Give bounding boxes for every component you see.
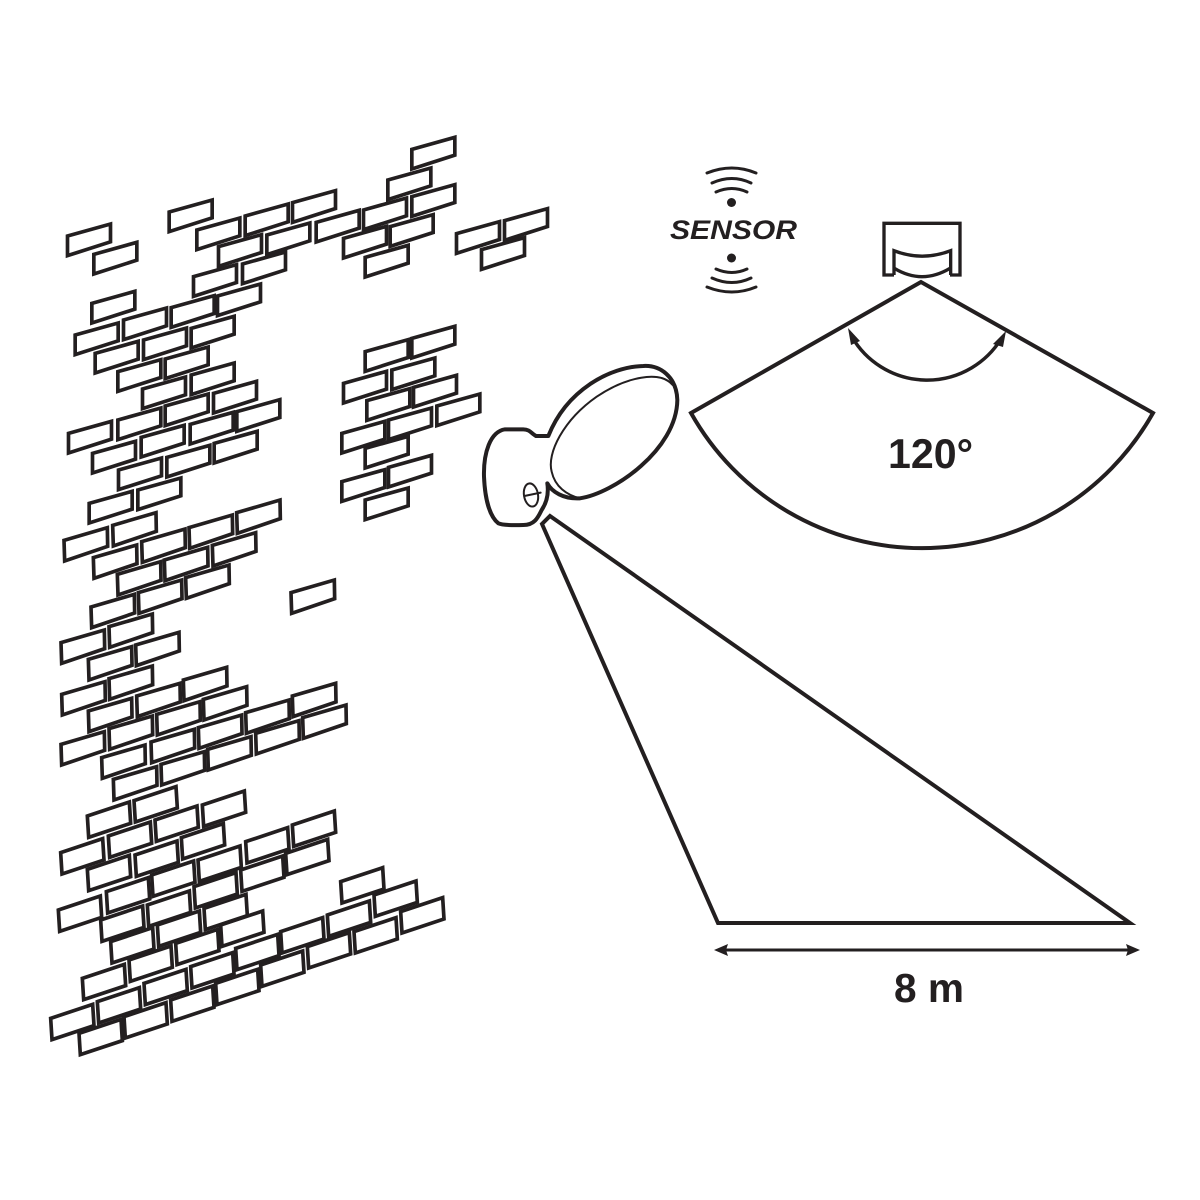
brick wall: upper section: [67, 137, 455, 523]
brick wall: middle section: [61, 500, 346, 800]
icon: sensor signal waves and wordmark: [670, 168, 798, 292]
arrow: 8 m range dimension: [714, 944, 1140, 956]
icon: wall-mounted sensor lamp: [484, 366, 677, 525]
detection zone: side-view beam triangle: [542, 516, 1130, 923]
brick wall: lower section: [51, 787, 444, 1055]
brick wall: top right bricks: [456, 209, 547, 269]
upper signal waves: [707, 168, 756, 292]
sensor wordmark: SENSOR: [670, 215, 798, 245]
brick wall: right cluster: [342, 326, 480, 520]
label: 120 degree angle: 120°: [888, 430, 973, 477]
detection zone: 120 degree sector: [691, 282, 1153, 548]
arrow: curved 120 degree angle indicator: [848, 328, 1006, 380]
single isolated brick: [291, 580, 335, 613]
icon: sensor head, front view: [884, 223, 960, 277]
label: 8 m range: 8 m: [894, 965, 964, 1011]
